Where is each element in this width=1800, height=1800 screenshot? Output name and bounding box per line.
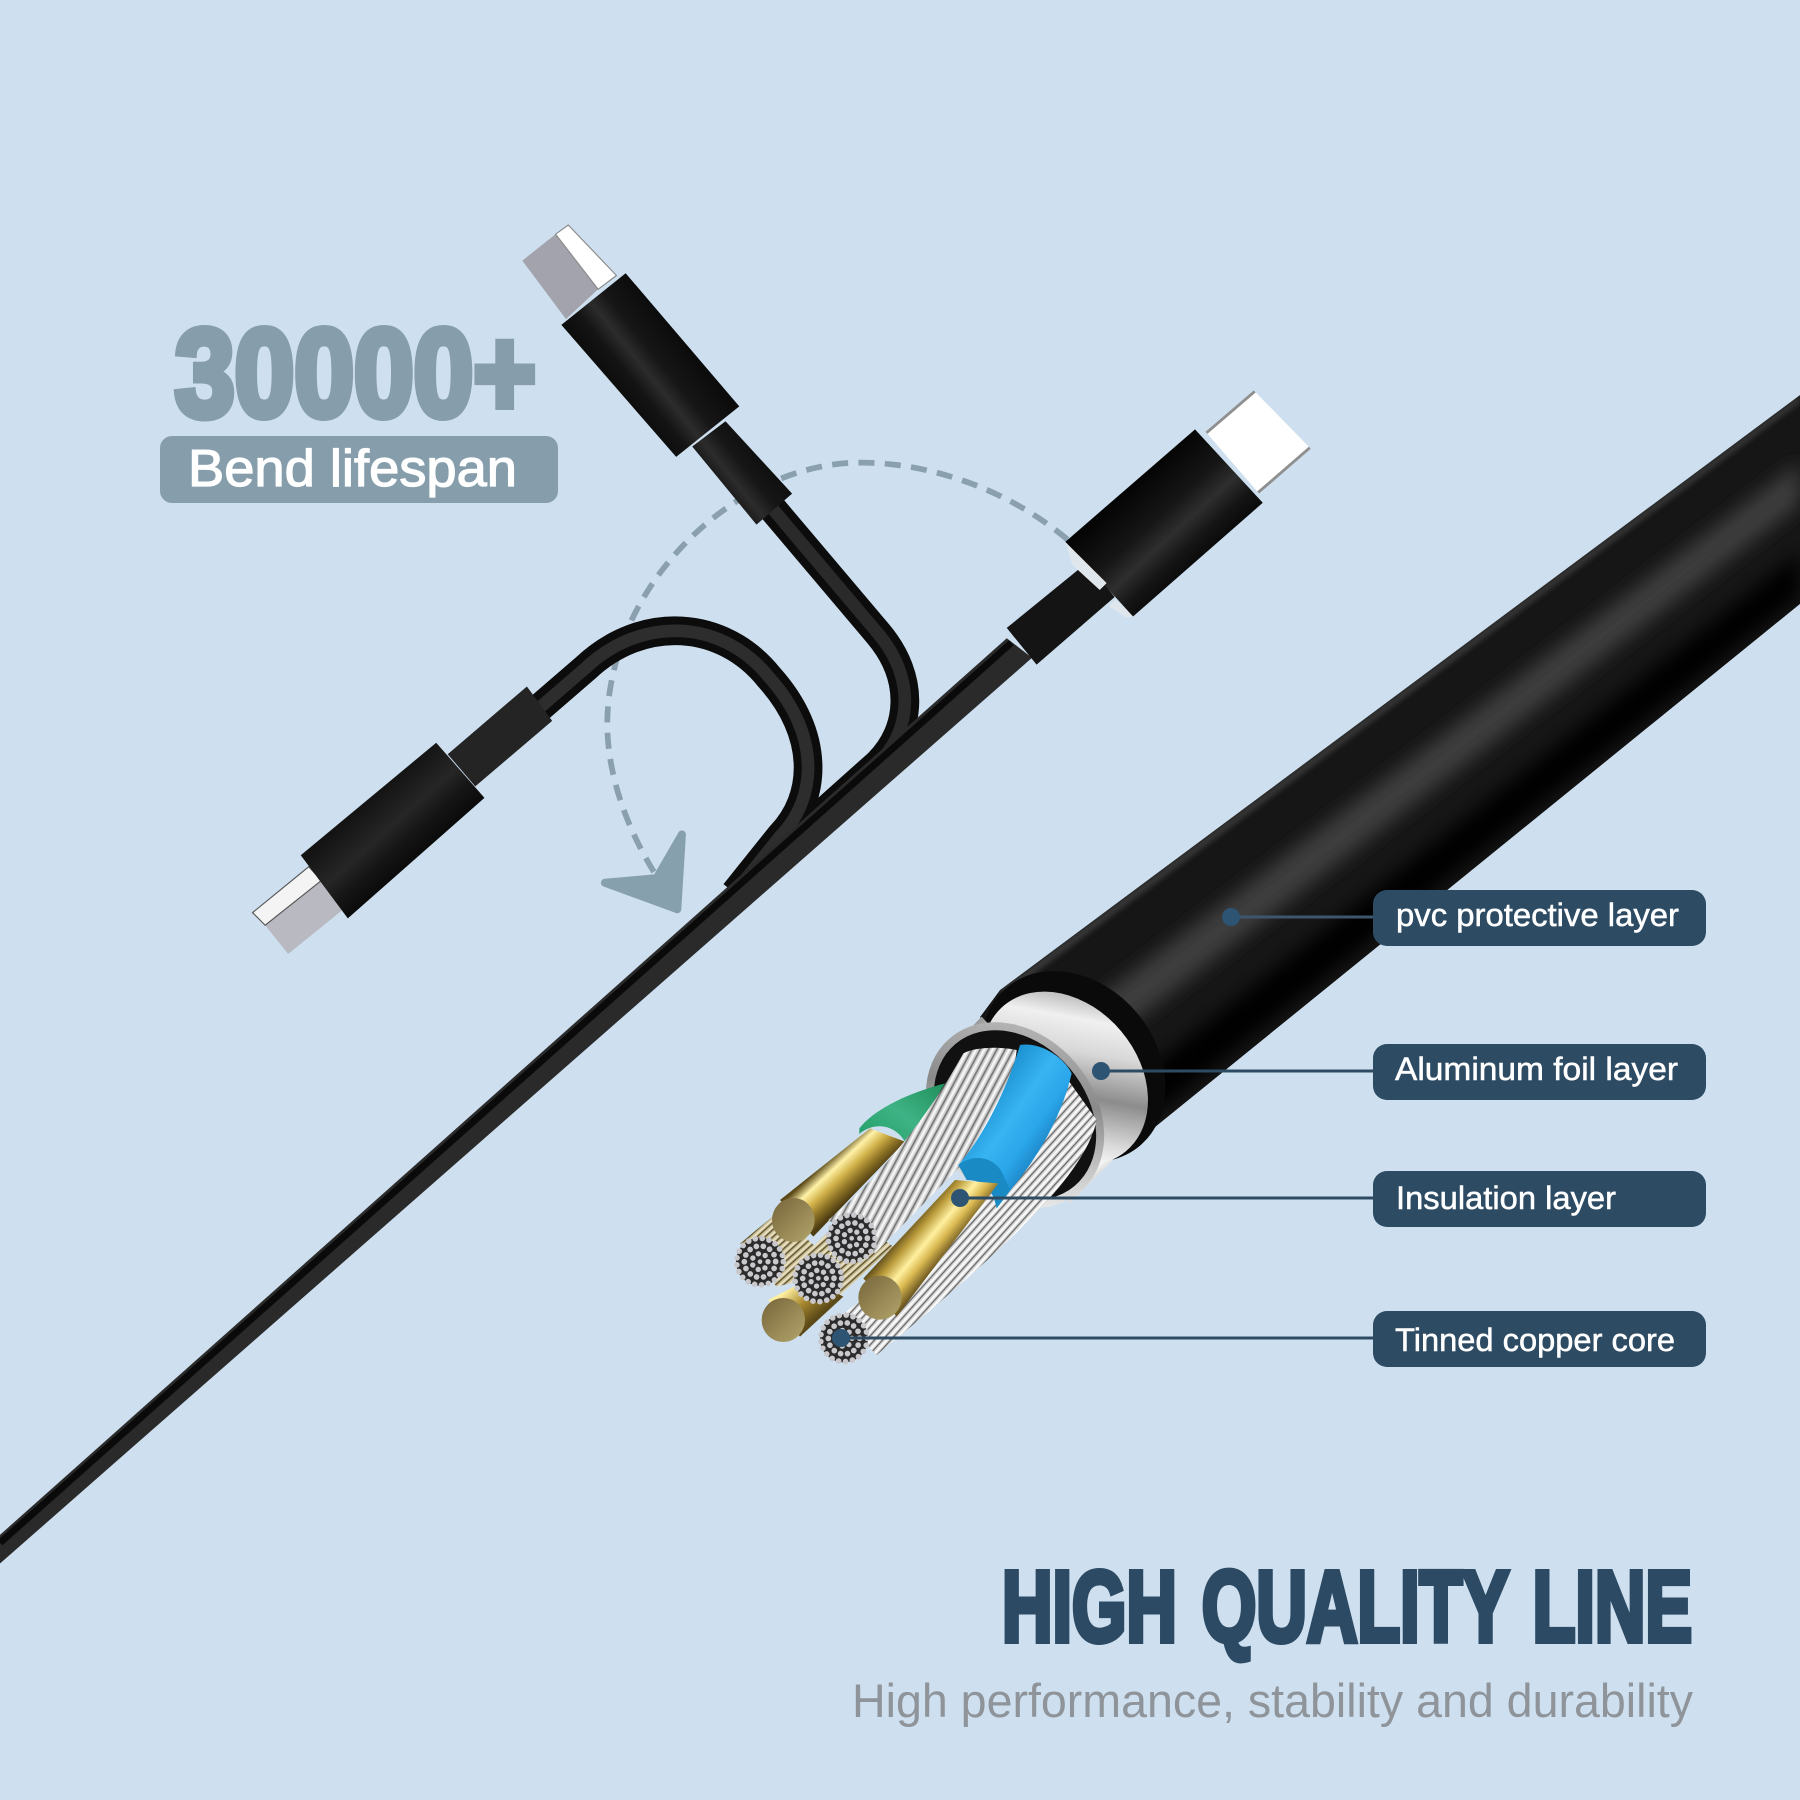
green insulation (859, 1083, 945, 1145)
bend lifespan pill (160, 436, 558, 503)
arrowhead (605, 835, 682, 909)
strand end: left (736, 1238, 784, 1286)
right USB-C connector (1007, 391, 1310, 665)
label pill: Tinned copper core (1395, 1322, 1675, 1358)
strand end: middle (794, 1254, 842, 1302)
callout: insulation layer (951, 1171, 1706, 1227)
label pill: Aluminum foil layer (1395, 1051, 1678, 1087)
leader line and dot (832, 1329, 1373, 1347)
gold wire lower (768, 1278, 843, 1337)
main flat cable (0, 638, 1032, 1564)
callout: tinned copper core (832, 1311, 1706, 1367)
bend lifespan figure (160, 305, 558, 503)
top USB-C connector (522, 225, 792, 525)
strand end: top (828, 1214, 876, 1262)
gold wire front (863, 1180, 998, 1317)
leader line and dot (1222, 908, 1373, 926)
leader line and dot (1092, 1062, 1373, 1080)
label pill: Insulation layer (1396, 1180, 1616, 1216)
strand end: bottom (820, 1314, 868, 1362)
charging cable with three connectors and bend arrow (0, 225, 1310, 1564)
dashed bend arc (607, 463, 1068, 882)
label pill (1373, 1311, 1706, 1367)
gold wire rear (780, 1128, 905, 1237)
right silver strand bundle (840, 1073, 1097, 1355)
cable loop to left connector (535, 631, 808, 893)
blue insulation (958, 1045, 1072, 1208)
bend lifespan pill: Bend lifespan (188, 440, 517, 498)
jacket end cap (943, 934, 1204, 1199)
cable branch to top connector (771, 507, 905, 840)
left silver strand bundle (740, 1213, 843, 1287)
leader line and dot (951, 1189, 1373, 1207)
middle silver strand bundle (797, 1213, 893, 1297)
aluminum foil layer (895, 958, 1182, 1238)
central silver strand bundle (828, 1048, 1017, 1253)
thick cable black jacket (980, 395, 1800, 1158)
callout: aluminum foil layer (1092, 1044, 1706, 1100)
subtitle: High performance, stability and durability (852, 1674, 1693, 1727)
left USB-C connector (253, 686, 552, 954)
label pill (1373, 1171, 1706, 1227)
label pill (1373, 1044, 1706, 1100)
label pill: pvc protective layer (1396, 897, 1679, 933)
callout: pvc protective layer (1222, 890, 1706, 946)
exposed cable end with foil and wires (736, 934, 1204, 1362)
label pill (1373, 890, 1706, 946)
30000+ number: 30000+ (175, 305, 536, 443)
